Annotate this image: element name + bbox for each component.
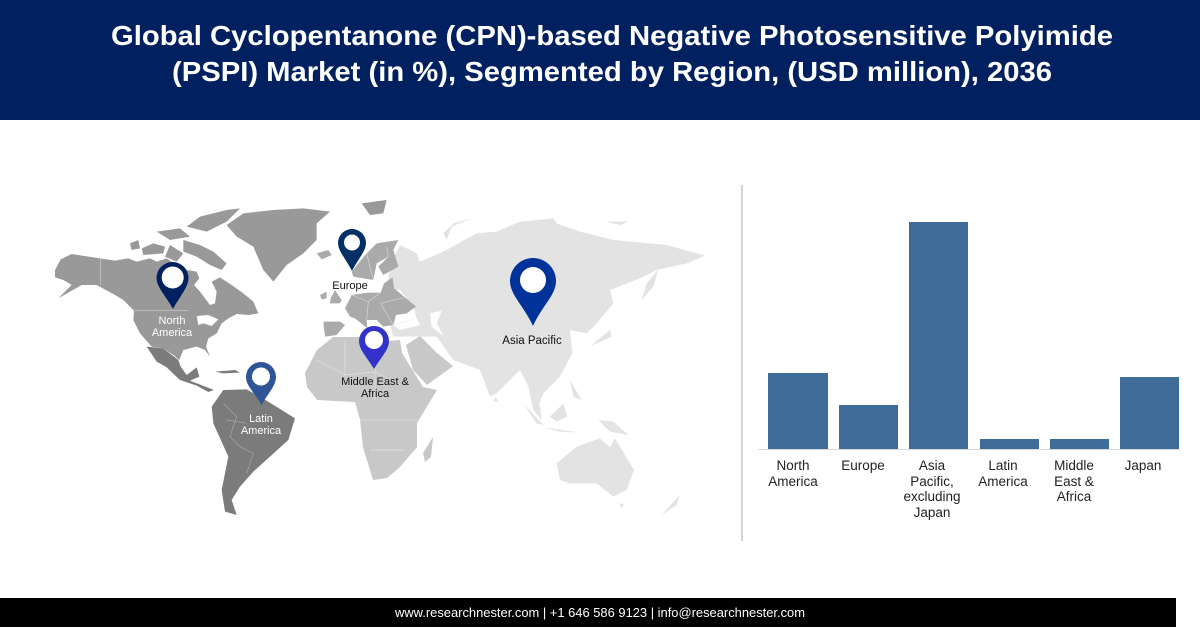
bar: North America [768,373,828,449]
bar labels: Africa [1057,489,1092,504]
label: Asia Pacific: Asia Pacific [502,335,562,347]
bar labels: America [768,474,818,489]
label: Middle East and Africa [341,376,410,400]
label: North America [152,315,193,339]
label: Middle East and Africa: Middle East & [341,376,410,388]
bar labels: Asia [919,458,946,473]
title: Global Cyclopentanone (CPN)-based Negative Photosensitive Polyimide [111,20,1113,51]
bar labels: East & [1054,474,1094,489]
pin: Europe [338,229,366,271]
bar labels: excluding [903,489,961,504]
label: Middle East and Africa: Africa [361,388,390,400]
map region: Latin America [147,347,295,515]
map region: Europe [317,240,416,337]
title: (PSPI) Market (in %), Segmented by Region, (USD million), 2036 [172,56,1052,87]
label: North America: North [159,315,185,327]
bar: Europe [839,405,898,449]
pin: Asia Pacific [510,258,556,326]
title [111,20,1113,87]
pin: North America [156,262,188,309]
bar labels: North [776,458,810,473]
bar labels: America [978,474,1028,489]
label: North America: America [152,327,193,339]
bar labels: Middle [1054,458,1094,473]
bar labels: Japan [1125,458,1161,473]
bar chart [758,222,1180,520]
bar labels: Pacific, [910,474,954,489]
map region: Asia Pacific [387,218,705,515]
header banner [0,0,1200,120]
bar labels: Japan [914,505,950,520]
bar: Latin America [980,439,1039,449]
footer bar [0,598,1176,627]
pin: Latin America [246,362,276,405]
label: Latin America: Latin [249,413,273,425]
bar labels: Latin [988,458,1018,473]
label: Latin America: America [241,425,282,437]
bar: Japan [1120,377,1179,449]
bar: Middle East and Africa [1050,439,1109,449]
pin: Middle East and Africa [359,326,389,369]
label: Latin America [241,413,282,437]
bar labels [768,458,1161,520]
world map [55,200,705,515]
map region: North America [55,200,387,360]
bar: Asia Pacific, excluding Japan [909,222,968,449]
footer contact text: www.researchnester.com | +1 646 586 9123 | info@researchnester.com [394,606,805,620]
map region: Middle East and Africa [305,336,453,480]
label: Europe: Europe [332,280,368,292]
bar labels: Europe [841,458,885,473]
